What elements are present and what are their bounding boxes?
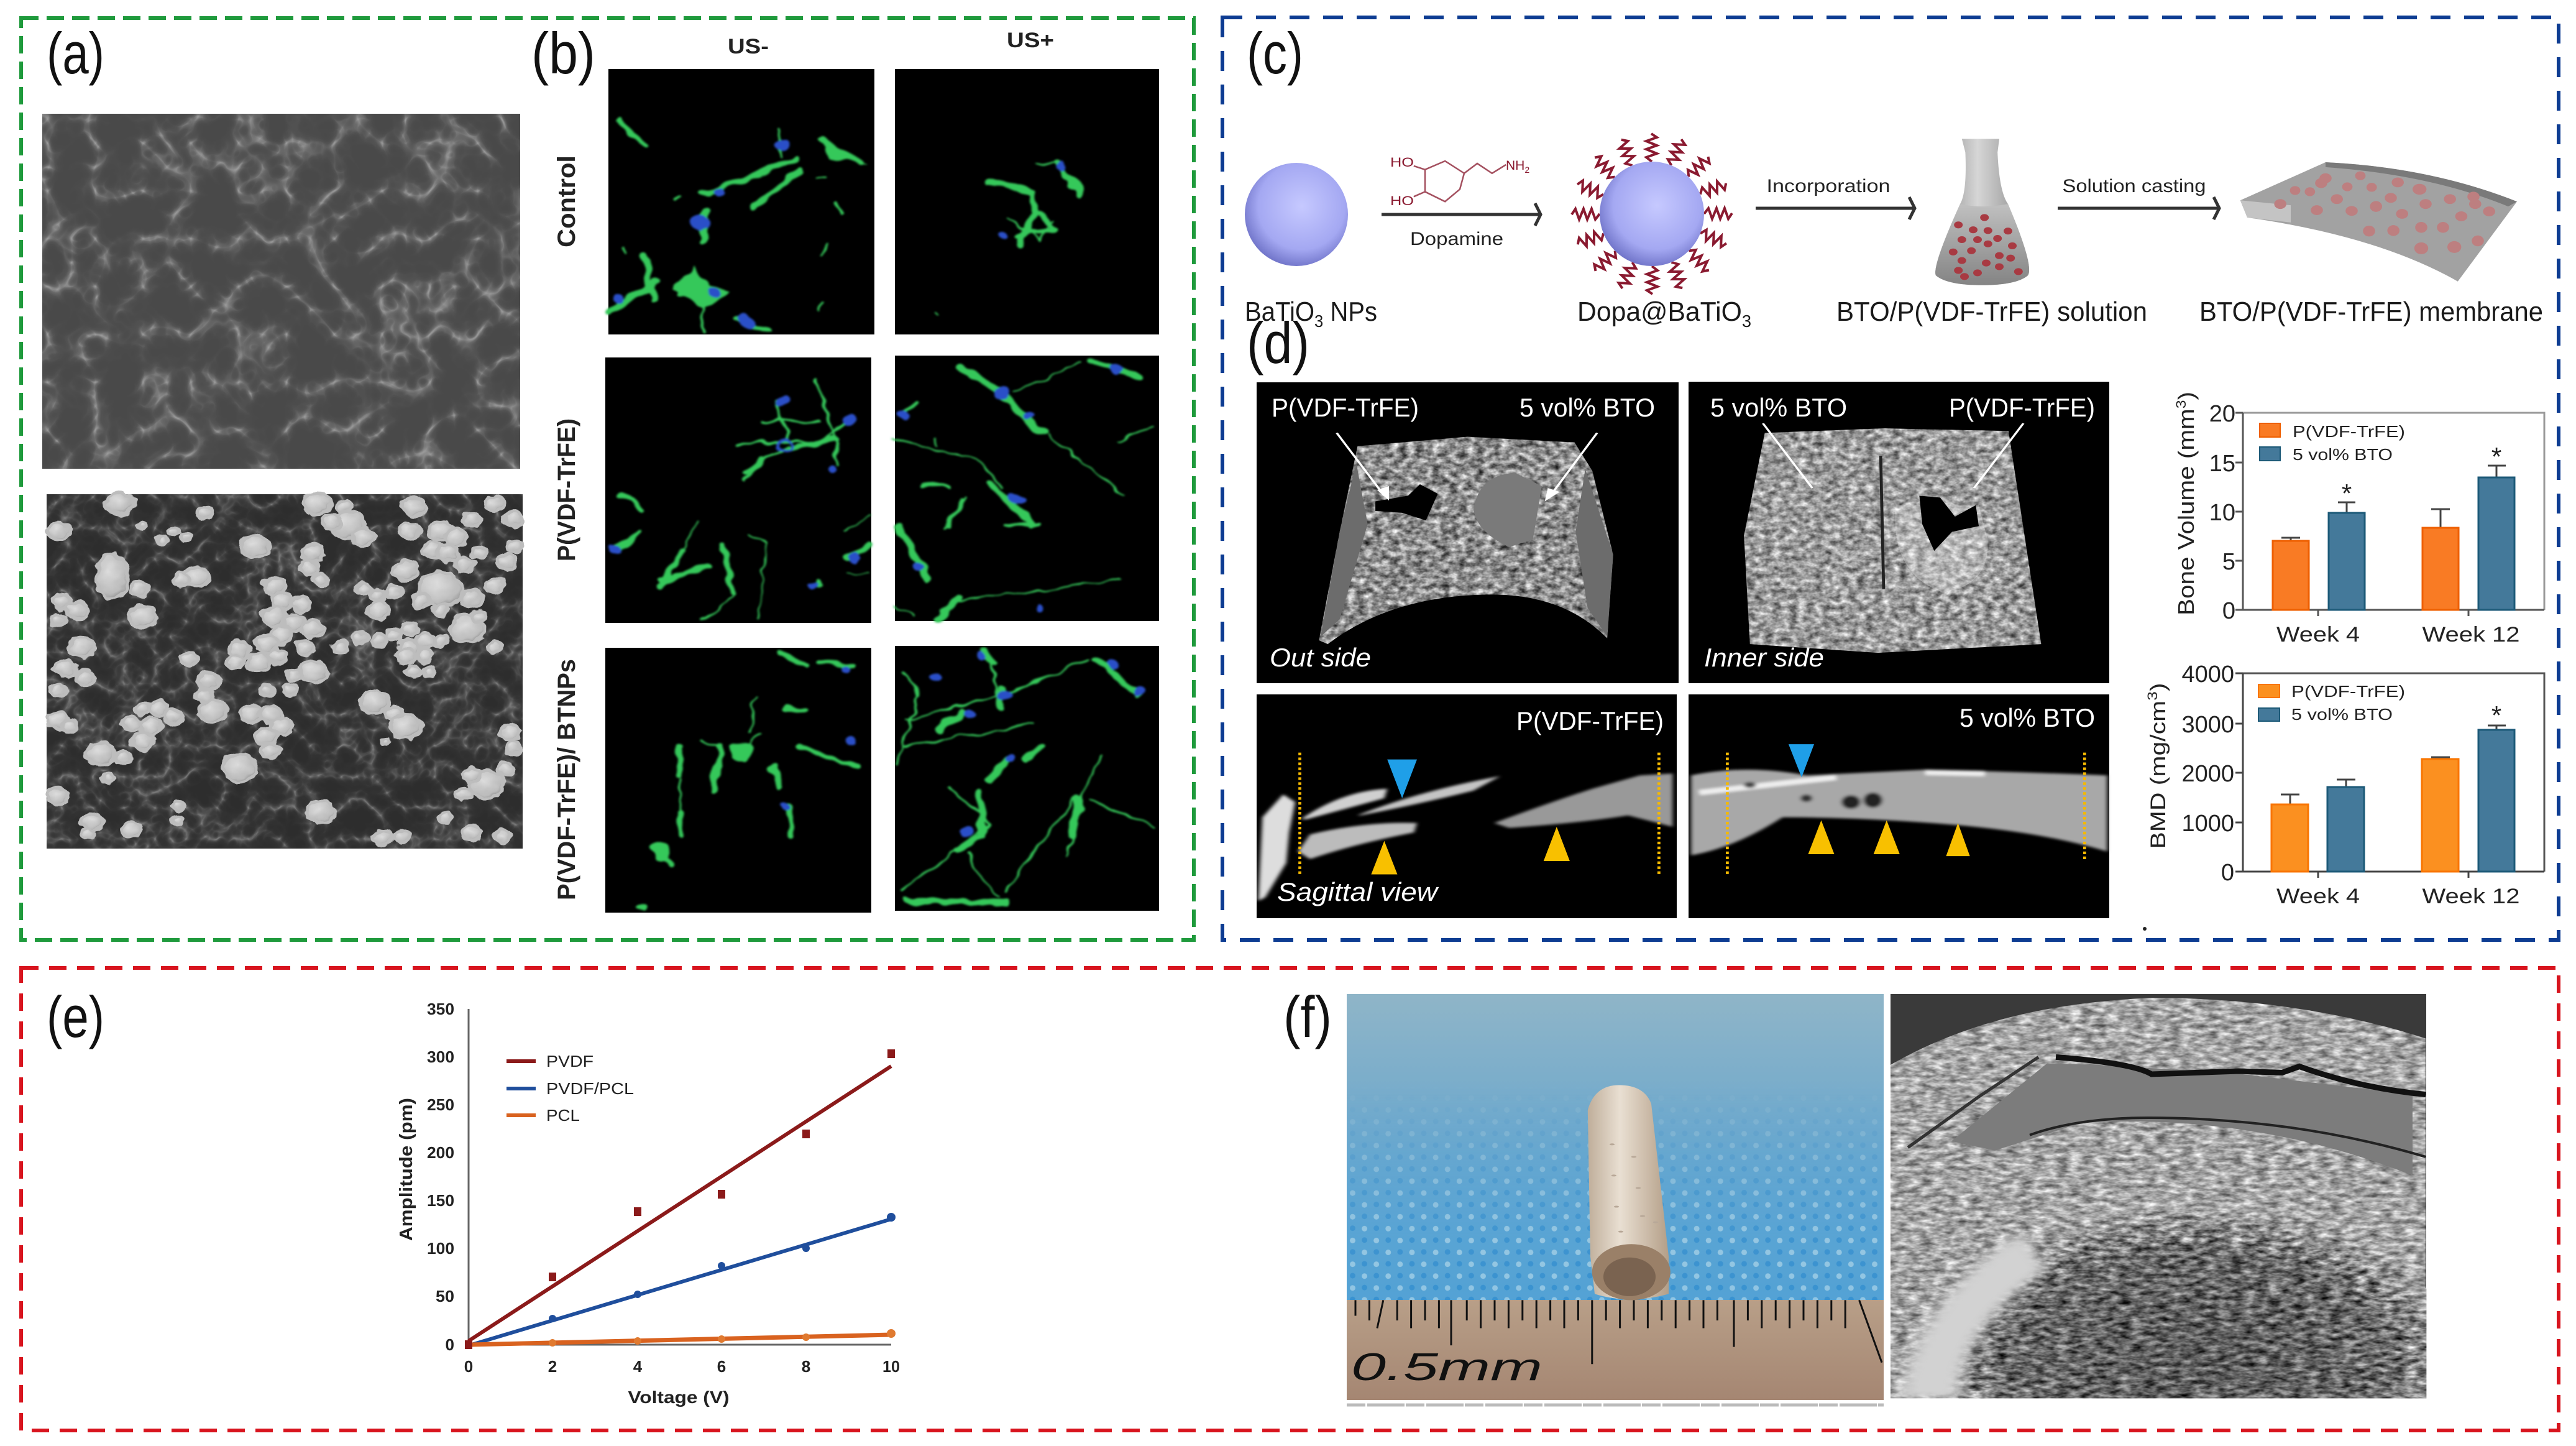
chart: amplitude vs voltage: 0 xyxy=(446,1335,454,1354)
chart: BMD: 3000 xyxy=(2181,712,2234,738)
text: Solution casting: Solution casting xyxy=(2062,176,2206,196)
image: BTNPs US- xyxy=(605,648,871,913)
text: 5 vol% BTO inner: 5 vol% BTO xyxy=(1710,393,1847,422)
chart: BMD: 4000 xyxy=(2181,661,2234,688)
label (d): (d) xyxy=(1247,310,1309,375)
caption: BaTiO3 NPs: 3 xyxy=(1314,311,1323,331)
chart: BMD: P(VDF-TrFE) xyxy=(2291,682,2405,701)
panel a: SEM images xyxy=(42,21,523,849)
text: NH2: 2 xyxy=(1524,165,1529,175)
text: 0.5mm: 0.5mm xyxy=(1351,1346,1542,1389)
r1c1 xyxy=(612,119,858,329)
chart: bone volume: 5 xyxy=(2222,549,2235,575)
r3c2 xyxy=(897,656,1155,898)
panel d: micro-CT images and charts xyxy=(1247,310,2544,931)
panel: blue frame c-d xyxy=(1222,17,2559,940)
chart: amplitude vs voltage: 10 xyxy=(882,1357,900,1376)
text: HO lower: HO xyxy=(1390,194,1414,208)
chart: BMD: ) xyxy=(2147,683,2170,691)
icon: Dopa@BaTiO3 sphere with chains xyxy=(1572,134,1732,294)
image: conduit photo on ruler xyxy=(1347,994,1884,1405)
label (c): (c) xyxy=(1247,21,1303,86)
chart: bone volume: Week 4 xyxy=(2276,623,2360,647)
chart: BMD: 1000 xyxy=(2181,811,2234,837)
r3c1 xyxy=(657,653,858,861)
chart: bone volume: Bone Volume (mm xyxy=(2173,431,2199,615)
chart: bone volume: * xyxy=(2491,442,2501,471)
chart: bone volume: 20 xyxy=(2209,401,2235,427)
chart: bone volume: P(VDF-TrFE) xyxy=(2293,422,2405,441)
text: Sagittal view: Sagittal view xyxy=(1277,877,1439,906)
chart: amplitude vs voltage: 0 xyxy=(464,1357,473,1376)
label (b): (b) xyxy=(531,21,595,86)
arrow: dopamine xyxy=(1382,203,1541,226)
text: Inner side: Inner side xyxy=(1704,643,1824,672)
image: sagittal view 5 vol% BTO xyxy=(1689,694,2109,918)
chart: bone volume: * xyxy=(2342,479,2352,508)
icon: flask with particles xyxy=(1935,139,2029,285)
text: 5 vol% BTO outer: 5 vol% BTO xyxy=(1519,393,1655,422)
label (a): (a) xyxy=(47,21,104,86)
image: SEM membrane with particles xyxy=(47,492,523,849)
chart: BMD: 5 vol% BTO xyxy=(2291,705,2393,724)
chart: amplitude vs voltage: 2 xyxy=(548,1357,557,1376)
text: Dopamine: Dopamine xyxy=(1410,229,1503,249)
chart: amplitude vs voltage: PCL xyxy=(546,1106,580,1125)
chart: bone volume: 3 xyxy=(2173,400,2189,408)
chart: amplitude vs voltage xyxy=(396,1000,900,1407)
r1c2 xyxy=(989,162,1082,244)
chart: BMD: Week 4 xyxy=(2276,885,2360,908)
image: P(VDF-TrFE) US+ xyxy=(895,356,1159,621)
label (f): (f) xyxy=(1283,984,1332,1049)
caption: Dopa@BaTiO3: Dopa@BaTiO xyxy=(1577,297,1747,327)
chart: bone volume: 15 xyxy=(2209,451,2235,477)
image: SEM membrane fibre web xyxy=(42,114,520,469)
caption: BaTiO3 NPs: NPs xyxy=(1323,297,1377,327)
row label P(VDF-TrFE)/ BTNPs: P(VDF-TrFE)/ BTNPs xyxy=(553,659,580,900)
chart: bone volume: 10 xyxy=(2209,500,2235,526)
panel b: fluorescence grid xyxy=(531,21,1159,913)
text: 5 vol% BTO sagittal: 5 vol% BTO xyxy=(1960,703,2095,732)
image: outer side micro-CT xyxy=(1257,382,1679,683)
panel: red frame e-f xyxy=(21,968,2559,1430)
chart: amplitude vs voltage: 6 xyxy=(717,1357,726,1376)
image: control US- xyxy=(608,69,874,334)
caption: Dopa@BaTiO3: 3 xyxy=(1742,311,1751,331)
image: sagittal view P(VDF-TrFE) xyxy=(1257,694,1677,918)
chart: amplitude vs voltage: 350 xyxy=(427,1000,454,1018)
caption: BTO/P(VDF-TrFE) membrane: BTO/P(VDF-TrFE) membrane xyxy=(2199,297,2543,327)
label (e): (e) xyxy=(47,984,104,1049)
chart: BMD: 3 xyxy=(2145,691,2160,701)
chart: BMD: 0 xyxy=(2221,860,2234,886)
icon: curved membrane xyxy=(2240,162,2517,282)
chart: bone volume: 0 xyxy=(2222,598,2235,624)
chart: amplitude vs voltage: PVDF/PCL xyxy=(546,1079,634,1098)
chart: bone volume: ) xyxy=(2173,392,2199,400)
chart: amplitude vs voltage: Amplitude (pm) xyxy=(396,1098,416,1241)
chart: amplitude vs voltage: 200 xyxy=(427,1143,454,1162)
row label P(VDF-TrFE): P(VDF-TrFE) xyxy=(553,418,580,561)
panel: green frame a-b xyxy=(21,18,1194,940)
image: BTNPs US+ xyxy=(895,646,1159,911)
chart: amplitude vs voltage: 100 xyxy=(427,1239,454,1258)
column label US+: US+ xyxy=(1007,29,1054,52)
chart: amplitude vs voltage: 8 xyxy=(802,1357,810,1376)
chart: bone volume: 5 vol% BTO xyxy=(2293,445,2393,464)
icon: BaTiO3 sphere xyxy=(1245,163,1348,266)
text: HO: HO xyxy=(1390,155,1414,170)
chart: amplitude vs voltage: Voltage (V) xyxy=(628,1388,730,1407)
text: P(VDF-TrFE) outer: P(VDF-TrFE) xyxy=(1272,393,1419,422)
chart: BMD: BMD (mg/cm xyxy=(2147,725,2170,849)
image: inner side micro-CT xyxy=(1689,382,2109,683)
chart: amplitude vs voltage: 250 xyxy=(427,1095,454,1114)
icon: dopamine molecule xyxy=(1414,161,1506,201)
chart: BMD: Week 12 xyxy=(2422,885,2519,908)
column label US-: US- xyxy=(728,35,769,58)
chart: amplitude vs voltage: PVDF xyxy=(546,1052,594,1071)
panel e: amplitude-voltage chart xyxy=(47,984,900,1407)
chart: bone volume xyxy=(2173,392,2544,647)
cells: green and blue stained cell bodies xyxy=(610,119,1155,910)
chart: amplitude vs voltage: 150 xyxy=(427,1191,454,1210)
text: Incorporation: Incorporation xyxy=(1766,176,1891,196)
text: NH2: NH xyxy=(1506,159,1524,173)
chart: amplitude vs voltage: 300 xyxy=(427,1048,454,1066)
panel c: synthesis scheme xyxy=(1245,21,2543,331)
text: P(VDF-TrFE) sagittal: P(VDF-TrFE) xyxy=(1516,706,1664,735)
caption: BTO/P(VDF-TrFE) solution: BTO/P(VDF-TrFE) solution xyxy=(1836,297,2147,327)
chart: bone volume: Week 12 xyxy=(2422,623,2519,647)
r2c1 xyxy=(738,382,846,482)
text: Out side: Out side xyxy=(1270,643,1371,672)
row label Control: Control xyxy=(553,155,580,247)
chart: BMD: * xyxy=(2491,701,2501,730)
panel f: conduit photo and SEM xyxy=(1286,994,2426,1406)
chart: amplitude vs voltage: 4 xyxy=(633,1357,643,1376)
chart: amplitude vs voltage: 50 xyxy=(436,1287,454,1306)
text: P(VDF-TrFE) inner: P(VDF-TrFE) xyxy=(1949,393,2095,422)
chart: BMD xyxy=(2145,661,2544,908)
image: conduit SEM cross-section xyxy=(1891,994,2426,1399)
chart: BMD: 2000 xyxy=(2181,761,2234,787)
image: P(VDF-TrFE) US- xyxy=(605,357,871,623)
r2c2 xyxy=(901,360,1140,620)
image: control US+ xyxy=(895,69,1159,334)
arrow: incorporation xyxy=(1756,197,1915,219)
caption: BaTiO3 NPs: BaTiO xyxy=(1245,297,1321,327)
arrow: solution casting xyxy=(2058,197,2219,219)
